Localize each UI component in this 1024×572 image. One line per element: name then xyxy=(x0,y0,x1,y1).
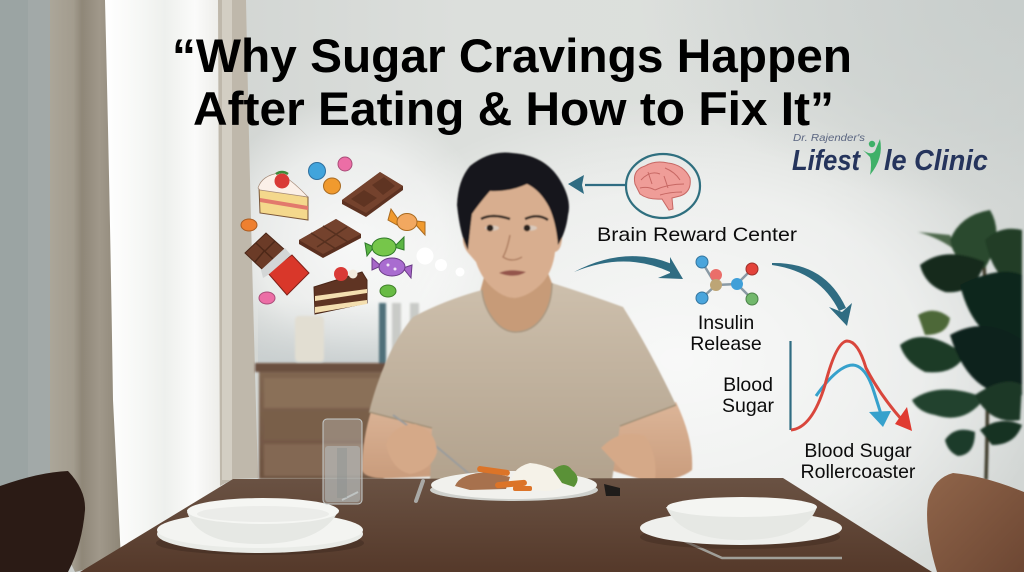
strawberry cake slice xyxy=(258,172,308,220)
logo: Lifestyle Clinic: Dr. Rajender's xyxy=(793,132,866,144)
chocolate cake slice xyxy=(314,267,367,314)
label: Blood Sugar Rollercoaster: Rollercoaster xyxy=(801,461,916,483)
label: Blood Sugar Rollercoaster xyxy=(801,440,916,483)
curtains and window xyxy=(0,0,258,572)
arrow: head to insulin xyxy=(574,256,683,279)
person xyxy=(362,153,692,483)
label: Insulin Release xyxy=(690,312,762,355)
arms xyxy=(362,400,692,482)
logo: Lifestyle Clinic: le Clinic xyxy=(884,145,988,177)
t-shirt xyxy=(369,283,676,480)
title: After Eating & How to Fix It” xyxy=(193,82,834,135)
thought cloud: sweets xyxy=(241,157,425,314)
dining table xyxy=(80,478,932,572)
title: “Why Sugar Cravings Happen xyxy=(172,29,852,82)
ears and face xyxy=(463,175,562,298)
eyes and brows xyxy=(481,216,548,260)
wrapped green candy xyxy=(365,237,404,256)
chart: blood sugar curves xyxy=(790,341,912,431)
candies xyxy=(241,157,396,304)
logo: Lifestyle Clinic: Lifest xyxy=(792,145,861,177)
chocolate bar top xyxy=(342,172,403,217)
arrow: insulin to blood sugar xyxy=(772,263,852,326)
label: Blood Sugar axis: Sugar xyxy=(722,395,775,417)
water glass xyxy=(323,419,362,504)
title xyxy=(172,29,852,135)
chocolate bar centre xyxy=(299,219,361,258)
logo: Lifestyle Clinic xyxy=(792,132,988,177)
wrapped orange candy xyxy=(388,209,425,235)
rice and potato xyxy=(510,463,566,491)
hair xyxy=(457,153,569,250)
plant xyxy=(900,210,1022,480)
icon: molecule xyxy=(696,256,758,305)
label: Blood Sugar Rollercoaster: Blood Sugar xyxy=(804,440,912,462)
neck xyxy=(480,268,553,336)
carrots xyxy=(477,466,532,491)
table fork and knife xyxy=(416,481,423,501)
label: Blood Sugar axis: Blood xyxy=(723,374,773,396)
hands and fork xyxy=(386,415,656,483)
icon: brain in circle xyxy=(626,154,700,218)
right place setting xyxy=(640,497,842,558)
centre meal plate xyxy=(416,463,620,501)
arrow: brain to head xyxy=(568,175,626,194)
sideboard and shelf decor xyxy=(255,303,419,479)
wrapped purple candy xyxy=(372,258,412,278)
thought bubbles xyxy=(416,248,464,276)
label: Insulin Release: Release xyxy=(690,333,762,355)
label: Insulin Release: Insulin xyxy=(698,312,754,334)
fish xyxy=(455,472,510,490)
sleeve seams and collar xyxy=(369,283,676,428)
label: Brain Reward Center: Brain Reward Center xyxy=(597,224,798,246)
left place setting xyxy=(156,492,364,555)
right chair xyxy=(927,473,1024,572)
label: Blood Sugar axis xyxy=(722,374,775,417)
mouth xyxy=(499,270,526,276)
broccoli xyxy=(553,465,578,487)
wrapped chocolate bar xyxy=(245,233,309,295)
left chair xyxy=(0,471,85,572)
